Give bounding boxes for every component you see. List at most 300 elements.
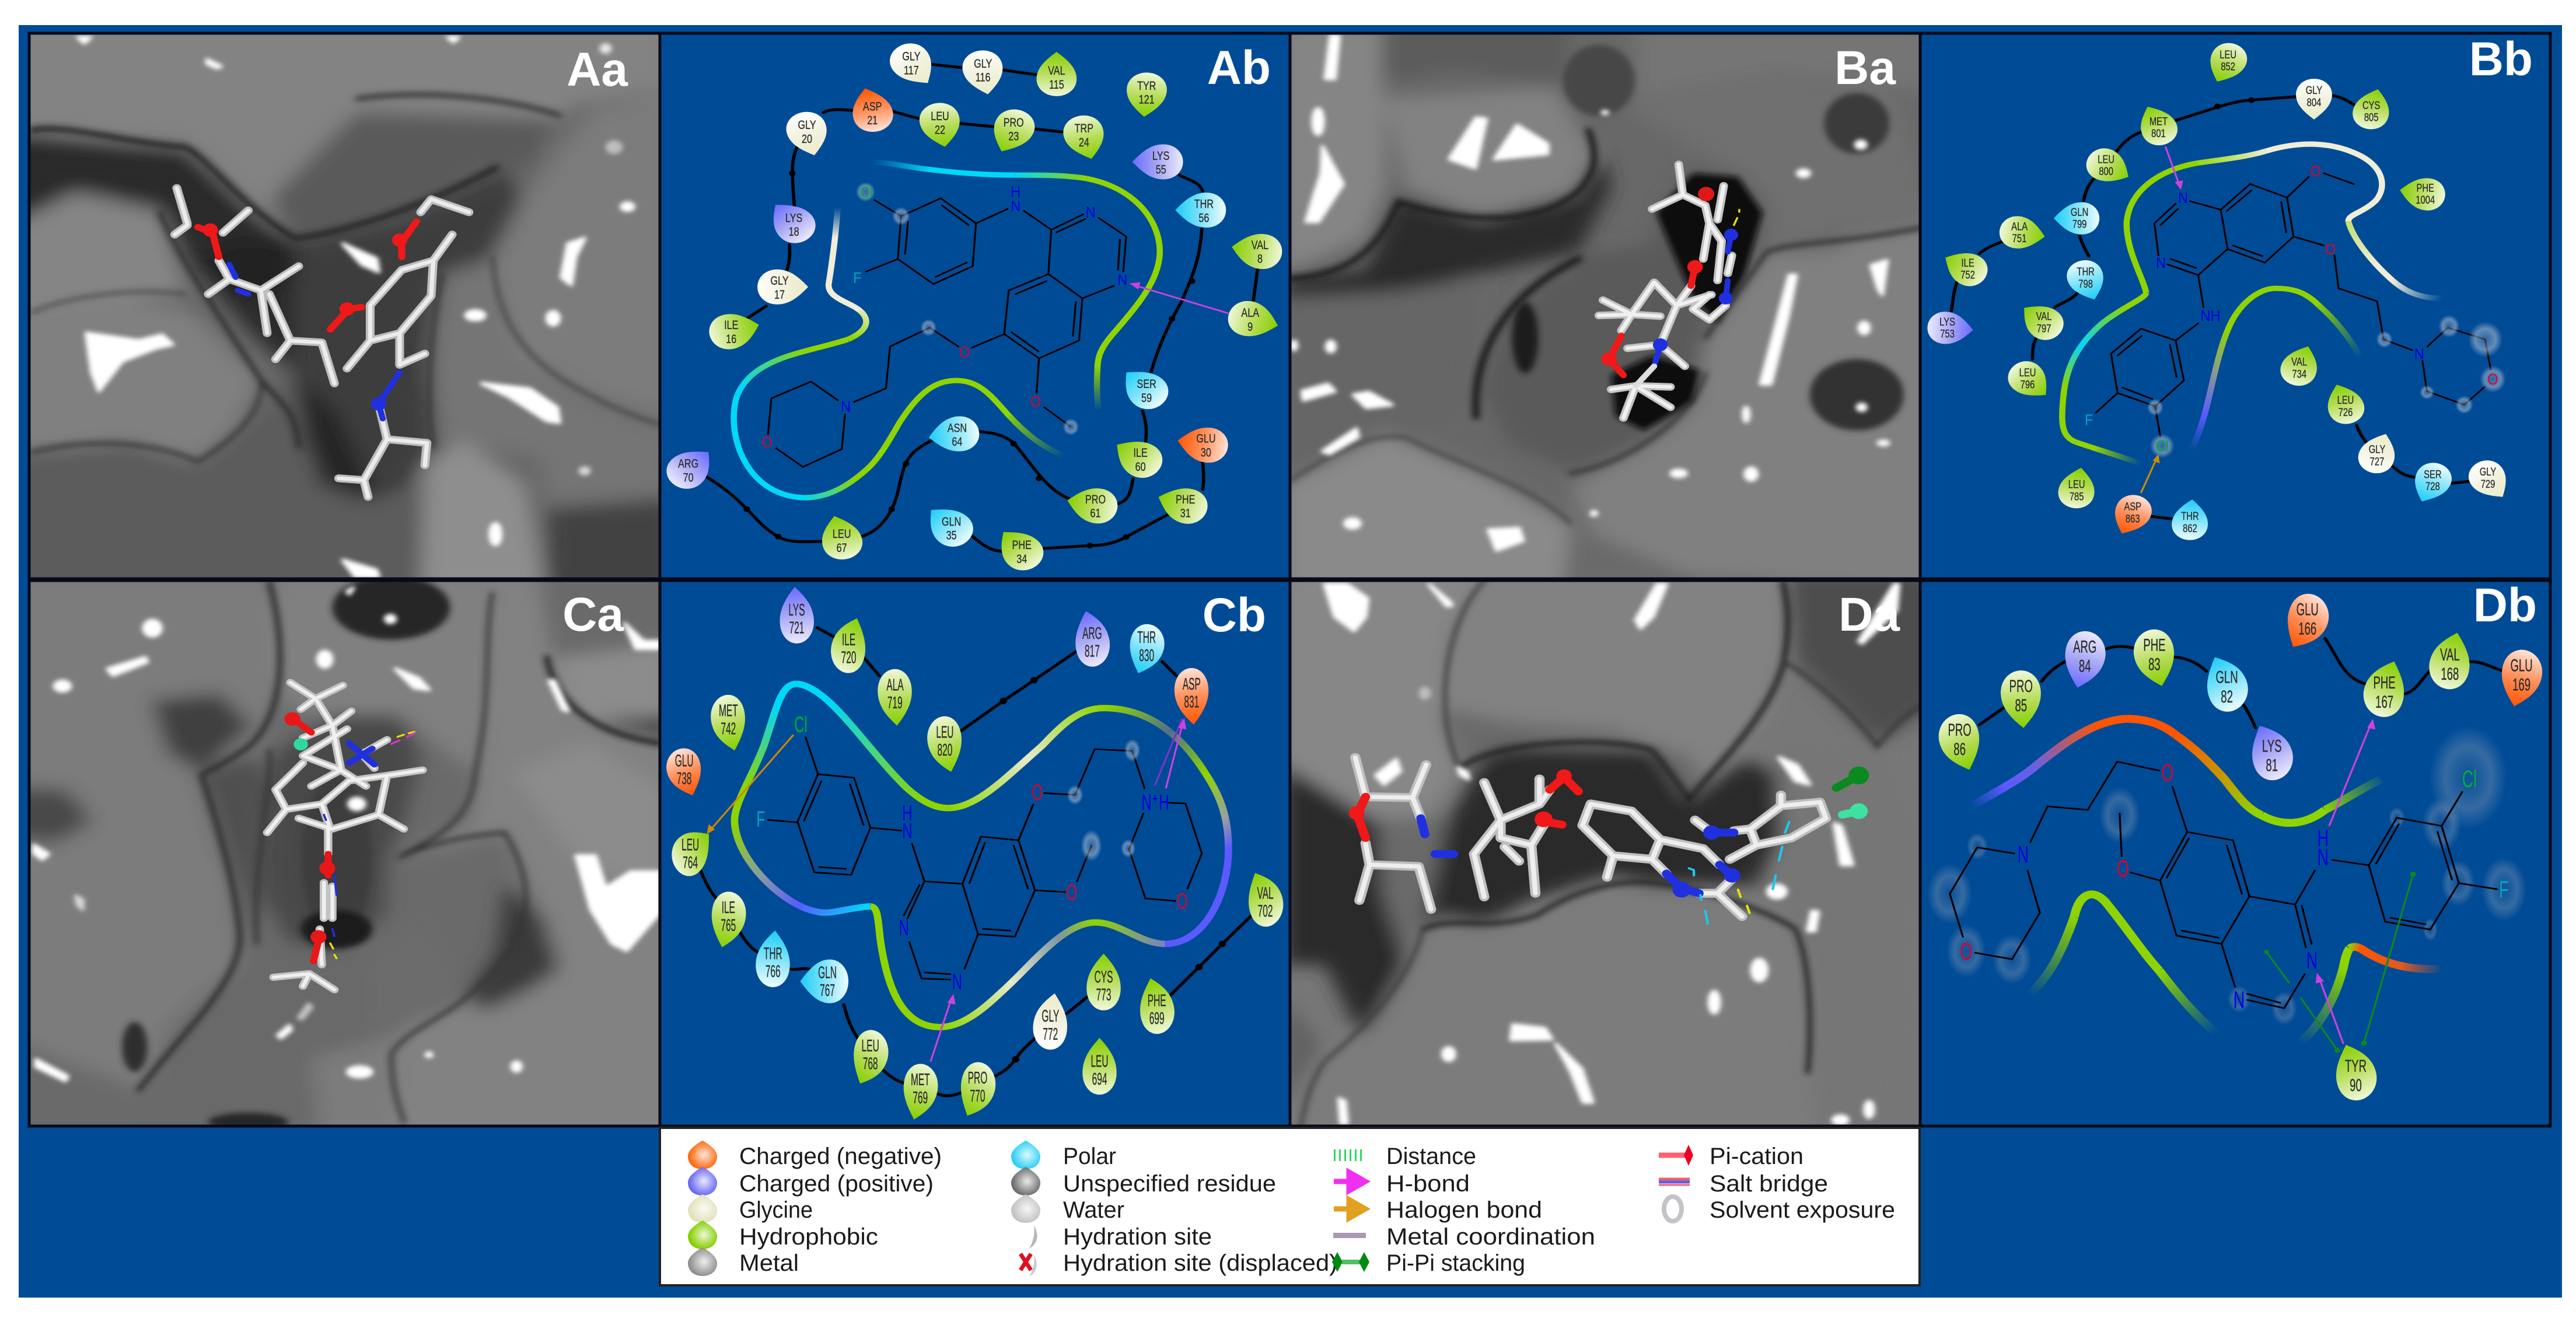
panel: Aa protein surface with ligand	[30, 35, 658, 578]
GLY 17: GLY	[771, 274, 789, 288]
legend column 1: Charged (positive)	[739, 1171, 934, 1197]
panel: Ba protein surface with ligand	[1292, 35, 1918, 578]
GLY 20	[782, 108, 834, 160]
ligand structure: O	[2325, 242, 2336, 258]
SER 59	[1112, 360, 1176, 416]
LYS 753: LYS	[1939, 316, 1955, 328]
LEU 726: 726	[2339, 406, 2353, 418]
SER 728: 728	[2425, 480, 2440, 493]
VAL 115: 115	[1049, 78, 1064, 92]
LEU 796: LEU	[2019, 366, 2036, 379]
PRO 23: PRO	[1004, 116, 1024, 130]
halogen bond arrow: ASP 863 to Cl	[2141, 454, 2160, 493]
TYR 121: TYR	[1137, 79, 1156, 93]
MET 742	[707, 690, 751, 756]
VAL 734: 734	[2292, 368, 2306, 380]
GLY 804: 804	[2307, 96, 2321, 109]
PHE 167: 167	[2375, 693, 2393, 712]
THR 766: 766	[766, 962, 781, 981]
THR 798: 798	[2078, 278, 2093, 290]
VAL 8: 8	[1257, 253, 1263, 266]
legend column 2: Water	[1063, 1197, 1124, 1223]
PRO 61: PRO	[1085, 493, 1106, 506]
ALA 719	[876, 667, 914, 728]
SER 59: 59	[1141, 391, 1152, 405]
GLY 727: 727	[2370, 456, 2384, 468]
THR 798	[2062, 256, 2112, 305]
CYS 773: CYS	[1095, 967, 1113, 986]
MET 742: 742	[721, 719, 736, 738]
ligand structure: Cl	[794, 712, 808, 737]
panel labels: Aa	[567, 43, 628, 96]
H-bond arrow: NH to PHE 167	[2329, 719, 2375, 826]
LEU 800	[2080, 142, 2137, 191]
GLN 82: GLN	[2215, 667, 2238, 687]
panel: Ab 2D interaction diagram	[666, 43, 1683, 1276]
ligand structure: Cl	[2156, 439, 2169, 455]
PRO 61: 61	[1090, 507, 1101, 520]
ARG 817: ARG	[1082, 624, 1102, 642]
ligand structure: O	[2117, 856, 2129, 882]
ligand structure: N	[2234, 987, 2245, 1013]
LYS 55: LYS	[1152, 149, 1169, 163]
H-bond arrow: MET 801 to N	[2165, 146, 2183, 190]
GLY 116: 116	[976, 71, 991, 85]
GLU 738: 738	[677, 769, 692, 788]
surface shading	[0, 572, 673, 1144]
GLY 727	[2353, 428, 2403, 478]
MET 801	[2131, 100, 2183, 151]
GLY 729: 729	[2481, 478, 2495, 490]
ligand structure: NH	[2200, 308, 2221, 324]
PHE 34: PHE	[1012, 539, 1032, 553]
ILE 720: 720	[841, 648, 857, 667]
GLU 166	[2276, 586, 2336, 658]
VAL 8	[1228, 230, 1285, 272]
VAL 797: 797	[2037, 323, 2051, 335]
LYS 753: 753	[1940, 328, 1955, 340]
legend column 1: Glycine	[739, 1197, 813, 1223]
ligand structure: O	[1177, 889, 1187, 914]
ARG 817: 817	[1085, 641, 1100, 660]
VAL 8: VAL	[1252, 239, 1268, 252]
PRO 85: 85	[2015, 696, 2027, 715]
GLY 772: 772	[1043, 1025, 1058, 1043]
GLY 117: GLY	[902, 50, 921, 64]
panel labels: Db	[2473, 579, 2537, 632]
PRO 23	[983, 104, 1041, 159]
H-bond and salt bridge lines: ASP 831	[1155, 718, 1186, 788]
MET 769: MET	[911, 1070, 930, 1089]
GLY 20: GLY	[798, 118, 816, 132]
GLU 30: GLU	[1196, 432, 1216, 446]
pocket ribbons	[734, 162, 1160, 498]
GLY 117: 117	[904, 64, 919, 78]
PHE 1004	[2397, 174, 2448, 213]
legend column 1	[688, 1141, 942, 1276]
GLY 17: 17	[774, 288, 785, 302]
TRP 24: TRP	[1075, 122, 1093, 136]
ligand structure: N	[1086, 204, 1096, 221]
panel labels: Bb	[2469, 33, 2533, 86]
pocket ribbons	[2062, 144, 2442, 463]
ASP 831	[1173, 666, 1211, 726]
THR 766	[754, 929, 792, 989]
LEU 796: 796	[2021, 379, 2035, 391]
MET 801: 801	[2151, 127, 2166, 140]
panel labels: Cb	[1203, 589, 1266, 642]
THR 798: THR	[2077, 265, 2095, 278]
MET 769	[897, 1059, 942, 1125]
VAL 168: 168	[2441, 665, 2459, 684]
H-bond arrow: ALA 9 to N	[1130, 282, 1228, 313]
GLY 772: GLY	[1041, 1006, 1059, 1025]
LEU 22: LEU	[931, 110, 949, 123]
GLU 738: GLU	[675, 751, 694, 770]
GLN 35	[917, 498, 981, 554]
ligand structure: N	[2306, 948, 2318, 974]
GLN 767: 767	[820, 981, 835, 999]
VAL 734: VAL	[2291, 356, 2307, 368]
ALA 719: ALA	[886, 675, 904, 694]
residue bubbles	[1926, 38, 2518, 541]
ligand sticks	[1349, 757, 1869, 924]
ligand structure: F	[756, 806, 765, 831]
legend column 3: Pi-Pi stacking	[1386, 1250, 1525, 1276]
ASN 64	[926, 414, 982, 455]
LEU 726: LEU	[2337, 394, 2354, 406]
ligand structure: O	[2487, 372, 2498, 388]
LYS 721: LYS	[788, 600, 805, 619]
ligand structure: H	[2318, 826, 2329, 852]
backbone chains	[707, 64, 1257, 551]
LYS 721	[778, 585, 815, 645]
ARG 817	[1069, 605, 1113, 672]
legend column 3: H-bond	[1386, 1171, 1470, 1197]
ALA 751: ALA	[2011, 221, 2028, 233]
ligand structure: F	[2499, 877, 2509, 903]
CYS 805	[2348, 85, 2395, 133]
PHE 34: 34	[1016, 553, 1027, 567]
ligand structure: O	[1030, 394, 1041, 410]
LEU 785: 785	[2070, 491, 2084, 503]
ARG 84: ARG	[2073, 637, 2096, 657]
ALA 719: 719	[887, 693, 903, 712]
ARG 84: 84	[2079, 656, 2091, 676]
LEU 768: 768	[863, 1054, 878, 1073]
TRP 24: 24	[1079, 136, 1089, 150]
LYS 81: 81	[2266, 756, 2278, 775]
VAL 168	[2425, 627, 2477, 694]
CYS 773: 773	[1096, 985, 1111, 1004]
PRO 86	[1933, 708, 1988, 778]
ALA 751: 751	[2012, 232, 2026, 245]
THR 830: THR	[1137, 628, 1156, 646]
CYS 805: 805	[2364, 111, 2378, 124]
legend column 2: Unspecified residue	[1063, 1171, 1276, 1197]
PRO 770: 770	[970, 1086, 985, 1105]
TRP 24	[1059, 111, 1111, 163]
VAL 702: 702	[1258, 901, 1273, 920]
LEU 67	[815, 512, 867, 564]
PHE 699: 699	[1149, 1009, 1165, 1027]
PRO 770	[952, 1055, 1001, 1125]
ligand structure	[2085, 163, 2506, 458]
PHE 699: PHE	[1148, 991, 1166, 1009]
LEU 726	[2320, 379, 2369, 428]
ligand sticks	[1599, 165, 1739, 418]
LEU 800: LEU	[2098, 153, 2114, 166]
legend column 1: Metal	[739, 1250, 799, 1276]
ALA 751	[1997, 214, 2048, 253]
THR 862	[2170, 498, 2210, 541]
ligand structure: H	[1011, 184, 1020, 201]
residue bubbles	[662, 585, 1289, 1125]
GLY 804	[2296, 79, 2332, 120]
PRO 85	[1999, 669, 2043, 730]
pocket ribbon	[735, 684, 1228, 1027]
LEU 796	[2001, 355, 2058, 407]
ASP 831: ASP	[1183, 674, 1201, 693]
ARG 70: ARG	[678, 457, 698, 471]
surface shading	[1284, 23, 1939, 595]
GLY 729	[2462, 455, 2518, 506]
LEU 67: 67	[837, 541, 847, 555]
GLY 20: 20	[802, 132, 812, 146]
GLY 804: GLY	[2306, 84, 2322, 97]
THR 830: 830	[1139, 646, 1154, 665]
VAL 702	[1239, 863, 1289, 934]
ASN 64: 64	[952, 435, 962, 449]
ASP 21: ASP	[863, 100, 882, 114]
panel labels: Ba	[1834, 41, 1896, 95]
VAL 734	[2276, 341, 2325, 390]
surface shading	[0, 0, 673, 596]
LEU 67: LEU	[833, 527, 851, 541]
ALA 9: 9	[1247, 320, 1253, 334]
THR 56: 56	[1198, 211, 1209, 225]
ILE 752: 752	[1960, 269, 1975, 281]
ligand structure: H	[902, 800, 913, 826]
surface shading	[1284, 572, 1939, 1144]
ligand structure: N	[899, 915, 909, 941]
ligand structure: O	[2161, 760, 2173, 786]
ligand structure: O	[959, 344, 970, 361]
MET 742: MET	[719, 701, 738, 720]
legend column 4: Salt bridge	[1710, 1171, 1828, 1197]
VAL 115: VAL	[1048, 64, 1065, 78]
LEU 785: LEU	[2068, 478, 2085, 491]
ILE 765	[705, 887, 750, 953]
PHE 31: 31	[1180, 507, 1191, 520]
ligand structure: N	[1117, 272, 1127, 289]
LEU 764: 764	[683, 853, 698, 872]
ASP 863	[2106, 490, 2158, 540]
TYR 121: 121	[1139, 93, 1155, 107]
backbone chains	[1952, 96, 2470, 519]
panel: Bb 2D interaction diagram	[688, 43, 2506, 1276]
ASP 831: 831	[1184, 692, 1199, 711]
residue bubbles	[1933, 586, 2547, 1107]
GLN 799: GLN	[2071, 206, 2088, 218]
LYS 55	[1133, 144, 1183, 179]
ASP 21	[845, 84, 897, 136]
PHE 83: 83	[2148, 655, 2161, 674]
ligand structure: N	[952, 969, 962, 994]
ligand sticks	[267, 683, 423, 990]
ASN 64: ASN	[948, 421, 967, 435]
GLY 772	[1030, 990, 1071, 1053]
panel labels: Da	[1838, 588, 1900, 641]
LEU 820: LEU	[936, 722, 953, 742]
TYR 90	[2327, 1037, 2382, 1107]
LEU 768: LEU	[862, 1036, 879, 1055]
PRO 770: PRO	[968, 1068, 987, 1087]
LEU 768	[845, 1023, 894, 1093]
VAL 797: VAL	[2036, 310, 2051, 323]
ALA 9: ALA	[1241, 306, 1259, 320]
LEU 22	[917, 100, 964, 150]
VAL 797	[2012, 295, 2071, 347]
GLY 117	[882, 37, 944, 93]
GLU 169	[2495, 645, 2547, 712]
PHE 83	[2129, 624, 2181, 692]
PHE 167: PHE	[2374, 673, 2396, 693]
GLU 166: 166	[2298, 619, 2316, 639]
GLY 116: GLY	[974, 57, 992, 71]
legend column 2	[1011, 1141, 1337, 1277]
LEU 764: LEU	[681, 835, 699, 854]
ligand structure: N	[2156, 255, 2166, 272]
pocket ribbons	[1971, 719, 2439, 1044]
legend column 2: Polar	[1063, 1144, 1116, 1169]
PRO 61	[1063, 483, 1121, 527]
LEU 852	[2201, 38, 2253, 89]
ARG 70	[659, 440, 723, 496]
ASP 863: ASP	[2124, 501, 2141, 513]
ILE 16: ILE	[724, 319, 738, 333]
legend column 3	[1332, 1144, 1595, 1276]
GLN 767: GLN	[818, 963, 837, 982]
ILE 60	[1106, 431, 1170, 484]
GLN 82	[2197, 648, 2255, 719]
GLY 727: GLY	[2369, 443, 2385, 456]
THR 830	[1122, 618, 1169, 680]
legend column 3: Metal coordination	[1386, 1224, 1595, 1250]
ligand structure	[756, 712, 1202, 994]
LYS 55: 55	[1156, 163, 1166, 177]
GLN 799: 799	[2072, 218, 2086, 230]
ligand structure: O	[1960, 939, 1972, 965]
LEU 852: LEU	[2220, 48, 2236, 61]
GLU 738	[662, 743, 708, 802]
LEU 694: 694	[1092, 1069, 1107, 1088]
legend	[660, 1128, 1920, 1285]
ligand structure: O	[1032, 779, 1043, 805]
GLN 35: GLN	[942, 515, 961, 529]
ALA 9	[1224, 297, 1283, 342]
legend column 3: Halogen bond	[1386, 1197, 1542, 1223]
PHE 167	[2358, 653, 2413, 723]
ligand structure: N	[2414, 347, 2424, 363]
ILE 765: ILE	[722, 898, 735, 917]
LEU 852: 852	[2221, 61, 2235, 73]
ILE 720	[826, 611, 873, 679]
legend column 4: Pi-cation	[1710, 1144, 1803, 1169]
halogen bond arrow: Cl to LEU 764	[707, 735, 794, 834]
THR 862: THR	[2181, 510, 2199, 522]
LYS 81: LYS	[2262, 736, 2282, 756]
GLN 799	[2054, 202, 2099, 235]
ARG 84	[2058, 626, 2110, 694]
ligand structure: N	[2178, 190, 2188, 207]
LEU 785	[2056, 465, 2099, 511]
ILE 60: ILE	[1133, 446, 1148, 460]
legend column 1: Hydrophobic	[739, 1224, 878, 1250]
ILE 765: 765	[721, 916, 736, 935]
GLN 35: 35	[946, 529, 957, 543]
TYR 90: TYR	[2345, 1056, 2367, 1076]
legend column 1: Charged (negative)	[739, 1144, 942, 1169]
SER 728: SER	[2424, 469, 2442, 481]
SER 59: SER	[1137, 377, 1156, 391]
LYS 753	[1926, 310, 1974, 346]
LEU 820	[924, 711, 967, 778]
ligand structure: Cl	[860, 184, 873, 201]
residue bubbles	[659, 37, 1285, 577]
PHE 34	[988, 521, 1051, 577]
THR 862: 862	[2183, 522, 2197, 534]
ILE 752: ILE	[1962, 257, 1974, 269]
MET 769: 769	[913, 1088, 928, 1107]
legend column 4: Solvent exposure	[1710, 1197, 1895, 1223]
GLN 767	[800, 960, 848, 1004]
ligand structure: F	[853, 270, 862, 286]
THR 56: THR	[1194, 197, 1214, 211]
backbone chains	[1979, 638, 2502, 728]
ARG 70: 70	[683, 471, 694, 485]
TYR 90: 90	[2350, 1076, 2362, 1095]
ligand structure: N	[1011, 198, 1020, 215]
panel labels	[562, 33, 2537, 642]
ligand structure: N⁺H	[1141, 789, 1169, 814]
TYR 121	[1124, 71, 1169, 118]
legend column 2: Hydration site	[1063, 1224, 1212, 1250]
ligand structure: O	[762, 435, 773, 451]
ASP 863: 863	[2126, 513, 2140, 525]
GLU 30	[1175, 423, 1231, 466]
GLU 169: GLU	[2510, 656, 2533, 676]
ILE 720: ILE	[842, 630, 855, 649]
panel labels: Ab	[1207, 41, 1271, 95]
LEU 800: 800	[2099, 165, 2113, 178]
ASP 21: 21	[867, 114, 878, 128]
LEU 764	[665, 818, 720, 885]
CYS 773	[1086, 953, 1121, 1011]
ligand structure: O	[2311, 163, 2321, 180]
LYS 18: LYS	[785, 211, 802, 225]
LYS 18	[760, 194, 823, 250]
THR 766: THR	[764, 944, 782, 963]
ILE 60: 60	[1135, 460, 1146, 474]
PHE 699	[1134, 973, 1178, 1039]
GLY 17	[757, 270, 808, 305]
PHE 31	[1152, 481, 1213, 529]
PHE 83: PHE	[2143, 635, 2166, 655]
backbone chains	[701, 628, 1252, 1096]
LYS 18: 18	[789, 225, 799, 239]
GLU 30: 30	[1201, 446, 1211, 460]
